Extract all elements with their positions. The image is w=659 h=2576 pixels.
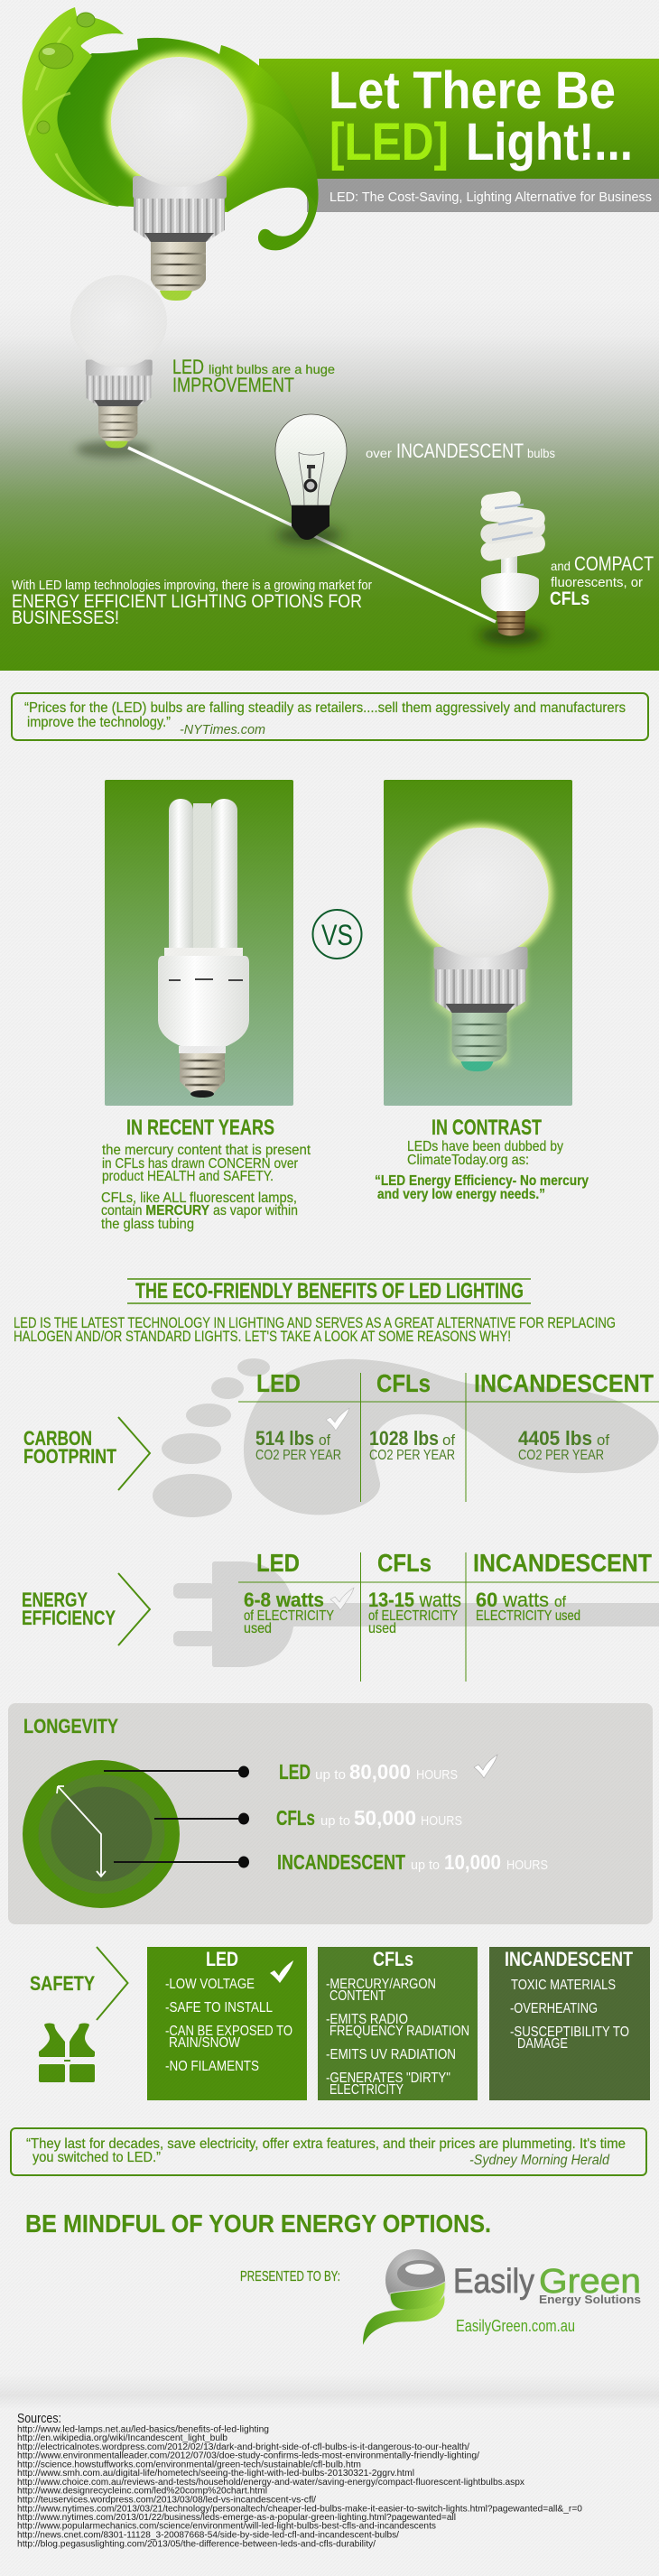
carbon footprint label: FOOTPRINT — [23, 1445, 116, 1468]
CFL caption: fluorescents, or — [551, 575, 643, 590]
energy efficiency table: CFLs — [377, 1549, 432, 1577]
text block: in contrast: IN CONTRAST — [432, 1116, 542, 1140]
energy efficiency table: LED — [256, 1549, 300, 1577]
carbon footprint table: of — [319, 1432, 330, 1449]
panel: incandescent safety: DAMAGE — [517, 2036, 568, 2052]
text block: in recent years: product HEALTH and SAFETY. — [102, 1169, 274, 1184]
CFL caption: and — [551, 559, 571, 573]
title — [329, 61, 633, 171]
panel: CFL safety — [318, 1947, 478, 2100]
connecting line — [128, 448, 496, 622]
energy efficiency label: ENERGY — [22, 1589, 88, 1611]
intro paragraph — [14, 1314, 616, 1345]
carbon footprint table: CO2 PER YEAR — [369, 1448, 455, 1463]
panel: CFL tube bulb — [105, 780, 293, 1106]
carbon footprint table: CO2 PER YEAR — [518, 1448, 604, 1463]
panel: CFL safety: ELECTRICITY — [330, 2082, 404, 2098]
arrow: safety chevron — [97, 1947, 128, 2020]
panel: CFL safety: -GENERATES "DIRTY" — [326, 2071, 450, 2086]
clock chart — [23, 1760, 180, 1908]
hero background gradient — [0, 298, 659, 671]
panel: LED safety — [147, 1947, 307, 2100]
text block: in contrast: and very low energy needs.” — [377, 1187, 545, 1202]
icon: LED bulb with glow — [408, 824, 552, 1071]
panel: longevity: LONGEVITY — [23, 1715, 118, 1737]
incandescent caption: over — [366, 446, 392, 460]
icon: incandescent bulb — [275, 414, 347, 544]
panel: longevity — [8, 1703, 653, 1924]
panel: CFL safety: FREQUENCY RADIATION — [330, 2024, 469, 2039]
icon: safety vest — [39, 2024, 95, 2082]
icon: main LED bulb — [107, 52, 253, 301]
title: Let There Be — [329, 61, 616, 120]
carbon footprint table: of — [597, 1432, 609, 1449]
LED hours row: HOURS — [416, 1767, 458, 1783]
market intro text: With LED lamp technologies improving, there is a growing market for — [12, 579, 372, 593]
logo: EasilyGreen: Easily — [453, 2263, 534, 2301]
panel: incandescent safety: -OVERHEATING — [510, 2001, 598, 2016]
panel: incandescent safety: -SUSCEPTIBILITY TO — [510, 2025, 629, 2040]
carbon footprint label: CARBON — [23, 1427, 92, 1450]
subtitle strip — [307, 179, 659, 212]
panel: incandescent safety: TOXIC MATERIALS — [511, 1978, 616, 1993]
LED hours row: LED — [279, 1760, 311, 1784]
panel: LED safety: -CAN BE EXPOSED TO — [165, 2024, 292, 2039]
incandescent hours row: up to — [411, 1858, 440, 1873]
callout: Sydney Morning Herald quote: you switched to LED.” — [32, 2150, 161, 2165]
arrow: energy chevron — [118, 1573, 150, 1645]
market intro text: ENERGY EFFICIENT LIGHTING OPTIONS FOR — [12, 591, 362, 612]
CFL hours row: up to — [320, 1813, 350, 1829]
text block: in recent years — [101, 1116, 311, 1232]
carbon footprint table: CFLs — [376, 1369, 431, 1397]
callout: NYTimes quote: “Prices for the (LED) bulbs are falling steadily as retailers....sell them aggressively and manufacturers — [24, 700, 626, 716]
LED hours row — [104, 1755, 497, 1784]
sources list — [17, 2411, 582, 2549]
LED hours row: up to — [315, 1767, 346, 1783]
logo: EasilyGreen: Green — [539, 2263, 641, 2301]
energy efficiency table: of — [554, 1593, 566, 1610]
text block: in recent years: in CFLs has drawn CONCERN over — [102, 1156, 299, 1172]
text block: in contrast: LEDs have been dubbed by — [407, 1139, 563, 1154]
CFL hours row: HOURS — [421, 1813, 462, 1829]
carbon footprint table: 514 lbs — [255, 1427, 314, 1450]
title: [LED] — [330, 113, 449, 171]
LED improvement caption: LED — [172, 356, 204, 378]
icon: spiral CFL bulb — [478, 490, 547, 644]
icon: logo swirl — [363, 2249, 445, 2345]
carbon footprint table: 4405 lbs — [518, 1427, 592, 1450]
icon: VS badge — [312, 910, 361, 959]
energy efficiency table: used — [244, 1621, 272, 1636]
market intro text — [12, 579, 372, 628]
CFL hours row: CFLs — [276, 1806, 315, 1830]
sources list: http://www.led-lamps.net.au/led-basics/benefits-of-led-lighting — [17, 2424, 269, 2434]
panel: LED safety: -SAFE TO INSTALL — [165, 2000, 273, 2015]
sources list: http://www.designrecycleinc.com/led%20comp%20chart.html — [17, 2487, 267, 2497]
callout: NYTimes quote — [12, 693, 648, 740]
text block: in recent years: the glass tubing — [101, 1217, 194, 1232]
panel: CFL safety: -MERCURY/ARGON — [326, 1977, 436, 1992]
panel: LED safety: -LOW VOLTAGE — [165, 1977, 255, 1992]
text block: in recent years: IN RECENT YEARS — [126, 1116, 274, 1140]
presented by label: PRESENTED TO BY: — [240, 2269, 340, 2284]
energy efficiency table: 60 watts — [476, 1589, 549, 1611]
icon: VS badge: VS — [321, 919, 353, 951]
icon: LED bulb on line — [70, 275, 167, 458]
panel: CFL safety: -EMITS UV RADIATION — [326, 2047, 456, 2062]
incandescent hours row — [114, 1850, 548, 1874]
icon: green leaves — [23, 7, 319, 250]
CFL hours row — [154, 1806, 462, 1830]
callout: Sydney Morning Herald quote — [11, 2128, 646, 2175]
sources list: http://news.cnet.com/8301-11128_3-20087668-54/side-by-side-led-cfl-and-incandescent-bulbs/ — [17, 2530, 399, 2540]
sources list: http://blog.pegasuslighting.com/2013/05/the-difference-between-leds-and-cfls-durability/ — [17, 2539, 376, 2549]
subtitle strip: LED: The Cost-Saving, Lighting Alternative for Business — [330, 190, 652, 205]
energy efficiency label: EFFICIENCY — [22, 1607, 116, 1629]
title: Light!... — [466, 113, 633, 171]
incandescent hours row: INCANDESCENT — [277, 1850, 405, 1874]
sources list: http://www.popularmechanics.com/science/environment/will-led-light-bulbs-best-cfls-and-incandescents — [17, 2522, 436, 2532]
panel: incandescent safety: INCANDESCENT — [505, 1948, 633, 1970]
title banner — [259, 59, 659, 212]
incandescent caption: bulbs — [527, 446, 555, 460]
panel: LED safety: LED — [206, 1948, 238, 1970]
icon: plug — [173, 1561, 659, 1667]
heading: eco-friendly benefits: THE ECO-FRIENDLY BENEFITS OF LED LIGHTING — [135, 1279, 524, 1303]
carbon footprint table: 1028 lbs — [369, 1427, 439, 1450]
panel: LED bulb — [384, 780, 572, 1106]
incandescent caption: INCANDESCENT — [396, 440, 524, 462]
safety label: SAFETY — [30, 1972, 95, 1995]
sources list: http://www.choice.com.au/reviews-and-tests/household/energy-and-water/saving-energy/compact-fluorescent-lightbulbs.aspx — [17, 2478, 524, 2488]
energy efficiency table: used — [368, 1621, 396, 1636]
sources list: http://www.nytimes.com/2013/03/21/technology/personaltech/cheaper-led-bulbs-make-it-easier-to-switch-lights.html?pagewanted=all&_r=0 — [17, 2504, 582, 2514]
LED hours row: 80,000 — [349, 1760, 411, 1784]
panel: CFL safety: CONTENT — [330, 1988, 385, 2004]
callout: Sydney Morning Herald quote: “They last for decades, save electricity, offer extra features, and their prices are plummeting. It's time — [26, 2136, 626, 2152]
energy efficiency table: 6-8 watts — [244, 1589, 324, 1611]
market intro text: BUSINESSES! — [12, 607, 119, 628]
CFL caption: CFLs — [550, 588, 589, 609]
carbon footprint label — [23, 1427, 116, 1468]
energy efficiency table: of ELECTRICITY — [244, 1608, 334, 1624]
carbon footprint table: LED — [256, 1369, 301, 1397]
energy efficiency table — [238, 1549, 659, 1682]
panel: LED safety: -NO FILAMENTS — [165, 2059, 259, 2074]
arrow: carbon chevron — [118, 1417, 150, 1490]
carbon footprint table — [238, 1369, 659, 1502]
energy efficiency table: ELECTRICITY used — [476, 1608, 580, 1624]
carbon footprint table: of — [442, 1432, 455, 1449]
sources list: http://www.nytimes.com/2013/01/22/business/leds-emerge-as-a-popular-green-lighting.html?pagewanted=all — [17, 2513, 456, 2523]
logo: EasilyGreen: EasilyGreen.com.au — [456, 2317, 575, 2335]
energy efficiency table: of ELECTRICITY — [368, 1608, 458, 1624]
incandescent hours row: 10,000 — [444, 1850, 501, 1874]
sources list: Sources: — [17, 2411, 61, 2426]
logo: EasilyGreen — [363, 2249, 641, 2345]
panel: incandescent safety — [489, 1947, 650, 2100]
text block: in recent years: the mercury content that is present — [102, 1143, 311, 1158]
icon: footprint — [153, 1358, 659, 1517]
text block: in recent years: CFLs, like ALL fluorescent lamps, — [101, 1191, 297, 1206]
icon: check mark — [270, 1960, 293, 1983]
intro paragraph: HALOGEN AND/OR STANDARD LIGHTS. LET'S TAKE A LOOK AT SOME REASONS WHY! — [14, 1328, 511, 1345]
panel: CFL safety: CFLs — [373, 1948, 413, 1970]
LED improvement caption: IMPROVEMENT — [172, 374, 294, 396]
closing headline: BE MINDFUL OF YOUR ENERGY OPTIONS. — [25, 2210, 491, 2238]
CFL caption — [550, 552, 654, 609]
sources list: http://electricalnotes.wordpress.com/2012/02/13/dark-and-bright-side-of-cfl-bulbs-is-it-dangerous-to-our-health/ — [17, 2442, 469, 2452]
carbon footprint table: CO2 PER YEAR — [255, 1448, 341, 1463]
icon: tube CFL — [158, 799, 249, 1098]
icon: check mark — [326, 1408, 349, 1431]
CFL hours row: 50,000 — [354, 1806, 416, 1830]
callout: Sydney Morning Herald quote: -Sydney Morning Herald — [469, 2153, 610, 2168]
text block: in contrast: ClimateToday.org as: — [407, 1153, 529, 1168]
text block: in recent years: contain MERCURY as vapor within — [101, 1203, 298, 1219]
panel: LED safety: RAIN/SNOW — [169, 2035, 241, 2051]
LED improvement caption: light bulbs are a huge — [209, 362, 335, 376]
sources list: http://science.howstuffworks.com/environmental/green-tech/sustainable/cfl-bulb.htm — [17, 2460, 361, 2469]
sources list: http://www.smh.com.au/digital-life/hometech/seeing-the-light-with-led-bulbs-20130321-2ggrv.html — [17, 2469, 414, 2479]
text block: in contrast — [375, 1116, 589, 1202]
incandescent hours row: HOURS — [506, 1858, 548, 1873]
sources list: http://en.wikipedia.org/wiki/Incandescent_light_bulb — [17, 2433, 227, 2443]
callout: NYTimes quote: improve the technology.” — [27, 715, 171, 730]
icon: check mark — [330, 1588, 354, 1610]
sources list: http://teuservices.wordpress.com/2013/03/08/led-vs-incandescent-vs-cfl/ — [17, 2495, 316, 2505]
sources list: http://www.environmentalleader.com/2012/07/03/doe-study-confirms-leds-most-environmentally-friendly-lighting/ — [17, 2451, 479, 2461]
LED improvement caption — [172, 356, 335, 396]
callout: NYTimes quote: -NYTimes.com — [180, 722, 265, 737]
energy efficiency table: 13-15 watts — [368, 1589, 461, 1611]
logo: EasilyGreen: Energy Solutions — [539, 2293, 641, 2306]
energy efficiency label — [22, 1589, 116, 1629]
panel: CFL safety: -EMITS RADIO — [326, 2012, 408, 2027]
text block: in contrast: “LED Energy Efficiency- No mercury — [375, 1173, 589, 1189]
